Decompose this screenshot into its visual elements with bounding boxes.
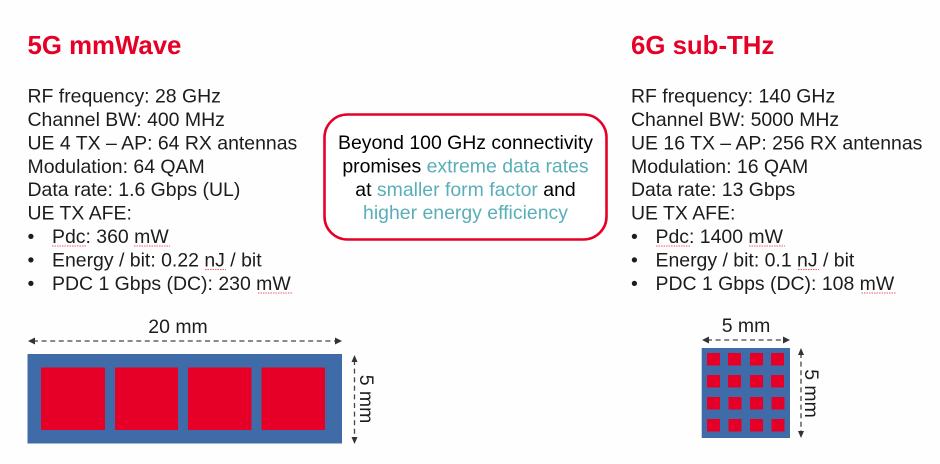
dimension: 20 mm width: 20 mm [148,316,208,338]
text block: 6G specifications: Modulation: 16 QAM [631,156,808,178]
text block: 5G specifications: Data rate: 1.6 Gbps (UL) [28,179,240,201]
text block: 6G specifications: • [631,226,638,248]
text block: 6G specifications: Data rate: 13 Gbps [631,179,796,201]
text block: 5G specifications: UE 4 TX – AP: 64 RX antennas [28,132,298,154]
text block: 6G specifications: Channel BW: 5000 MHz [631,109,839,131]
text block: 6G specifications: UE TX AFE: [631,202,735,224]
callout: beyond 100 GHz: higher energy efficiency [363,202,568,224]
text block: 5G specifications: Modulation: 64 QAM [28,156,205,178]
text block: 5G specifications: Energy / bit: 0.22 nJ / bit [52,250,262,272]
text block: 6G specifications: RF frequency: 140 GHz [631,86,835,108]
text block: 6G specifications: PDC 1 Gbps (DC): 108 mW [656,273,895,295]
text block: 5G specifications: • [28,273,34,295]
callout: beyond 100 GHz: Beyond 100 GHz connectivity [338,132,593,154]
heading: 5G mmWave: 5G mmWave [28,32,181,60]
antenna elements [707,353,784,432]
panel: 5G mmWave [28,32,377,444]
text block: 6G specifications: Energy / bit: 0.1 nJ / bit [656,250,855,272]
text block: 6G specifications: • [631,250,638,272]
text block: 5G specifications: UE TX AFE: [28,202,132,224]
text block: 5G specifications: • [28,226,34,248]
callout: beyond 100 GHz [324,114,606,240]
callout: beyond 100 GHz: promises extreme data rates [342,156,589,178]
panel: 6G sub-THz [631,32,923,438]
text block: 6G specifications: UE 16 TX – AP: 256 RX antennas [631,132,923,154]
chip diagram: 6G antenna module [702,315,822,438]
text block: 5G specifications: RF frequency: 28 GHz [28,86,221,108]
text block: 5G specifications: Pdc: 360 mW [52,226,169,248]
dimension: 5 mm height: 5 mm [800,369,822,418]
text block: 6G specifications [631,86,923,295]
dimension: 5 mm height [352,355,377,444]
text block: 5G specifications: PDC 1 Gbps (DC): 230 mW [52,273,291,295]
chip diagram: 5G antenna module [28,316,377,444]
dimension: 20 mm width [28,316,342,344]
text block: 6G specifications: • [631,273,638,295]
text block: 5G specifications: Channel BW: 400 MHz [28,109,225,131]
text block: 5G specifications: • [28,250,34,272]
text block: 5G specifications [28,86,298,295]
callout: beyond 100 GHz: at smaller form factor and [355,179,576,201]
heading: 6G sub-THz: 6G sub-THz [631,32,774,60]
dimension: 5 mm width: 5 mm [722,315,770,337]
dimension: 5 mm height: 5 mm [355,375,377,423]
substrate [702,348,790,438]
antenna elements [41,368,325,430]
substrate [28,354,342,444]
text block: 6G specifications: Pdc: 1400 mW [656,226,784,248]
